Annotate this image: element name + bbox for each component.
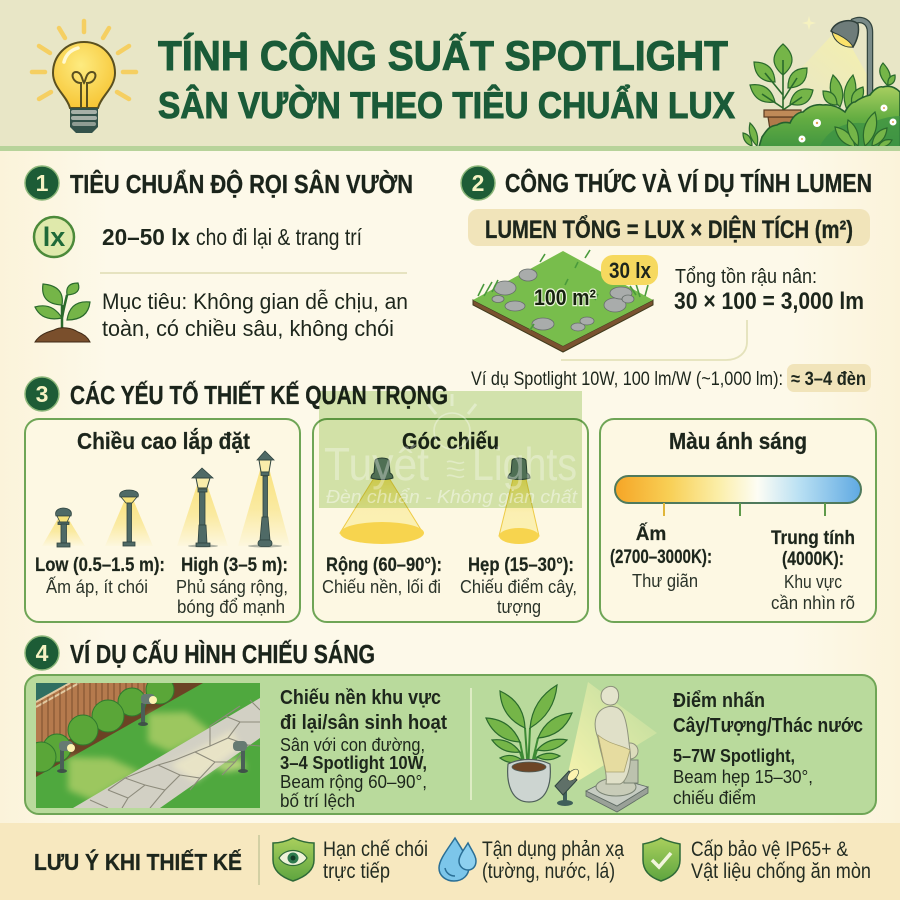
ambient lighting text: 3–4 Spotlight 10W, [280, 753, 427, 773]
heading 3 [25, 377, 448, 411]
icon: low bollard lamp [42, 508, 85, 547]
heading 4: 4 [36, 640, 49, 666]
title: TÍNH CÔNG SUẤT SPOTLIGHT [158, 31, 728, 79]
lux range text [102, 224, 363, 250]
illustration: garden lamp, potted plant and bushes [743, 16, 900, 150]
lux range text: 20–50 lx [102, 224, 190, 250]
back leaves [830, 75, 843, 107]
watermark: Đèn chuẩn - Không gian chất [326, 487, 578, 507]
goal text: toàn, có chiều sâu, không chói [102, 316, 394, 341]
accent lighting text: Điểm nhấn [673, 690, 765, 712]
panel: mounting height [25, 419, 300, 622]
watermark: Lights [472, 438, 577, 490]
spotlights in scene [57, 694, 248, 773]
panel: beam angle [313, 419, 588, 622]
icon: lux badge [34, 217, 74, 257]
accent lighting text [673, 690, 863, 808]
high label: Phủ sáng rộng, [176, 576, 288, 597]
heading 4 [25, 636, 375, 670]
note: protection [691, 838, 871, 883]
narrow label: Chiếu điểm cây, [460, 576, 577, 597]
heading 1 [25, 166, 413, 200]
icon: shield with check [643, 838, 680, 881]
wide label: Rộng (60–90°): [326, 555, 442, 576]
accent lighting text: Beam hẹp 15–30°, [673, 767, 813, 787]
accent lighting text: chiếu điểm [673, 788, 756, 808]
narrow label: tượng [497, 596, 541, 617]
badge: 30 lx: 30 lx [609, 258, 652, 283]
ambient lighting text: Chiếu nền khu vực [280, 687, 441, 709]
heading 3: 3 [36, 381, 48, 407]
neutral label [771, 528, 855, 613]
warm label: Ấm [636, 523, 666, 545]
icon: seedling [35, 283, 90, 342]
narrow label [460, 555, 577, 617]
icon: lux badge: lx [43, 222, 65, 252]
icon: tall lantern lamp [238, 451, 290, 548]
accent lighting text: 5–7W Spotlight, [673, 746, 795, 766]
total lumen text [674, 266, 864, 315]
illustration: garden path scene [26, 676, 260, 808]
accent lighting text: Cây/Tượng/Thác nước [673, 715, 863, 737]
section 1: lighting standard [25, 166, 413, 342]
footer heading: LƯU Ý KHI THIẾT KẾ [34, 848, 242, 875]
illustration: potted plant [486, 685, 572, 802]
warm label: (2700–3000K): [610, 547, 712, 568]
header banner [0, 0, 900, 151]
colour temperature bar [615, 476, 861, 516]
low label: Ấm áp, ít chói [46, 576, 148, 597]
illustration: 100 m2 lawn [473, 250, 653, 352]
section 2: formula and example [461, 166, 872, 392]
title [158, 31, 735, 126]
high label [176, 555, 288, 617]
arrow connector [561, 320, 747, 360]
total lumen text: Tổng tồn rậu nân: [675, 266, 817, 288]
note: glare [323, 838, 428, 883]
watermark [319, 391, 582, 508]
stone path [73, 698, 260, 808]
low label [35, 555, 165, 597]
neutral label: cần nhìn rõ [771, 592, 855, 613]
example note [471, 364, 871, 392]
narrow label: Hẹp (15–30°): [468, 555, 574, 576]
wide label [322, 555, 442, 597]
heading 4: VÍ DỤ CẤU HÌNH CHIẾU SÁNG [70, 639, 375, 669]
panel: configuration examples [25, 675, 876, 814]
warm label [610, 523, 712, 591]
low label: Low (0.5–1.5 m): [35, 555, 165, 576]
lux range text: cho đi lại & trang trí [196, 224, 363, 250]
heading 1: TIÊU CHUẨN ĐỘ RỌI SÂN VƯỜN [70, 169, 413, 199]
icon: narrow beam cone [499, 458, 539, 544]
footer: design notes [0, 823, 900, 900]
note: protection: Cấp bảo vệ IP65+ & [691, 838, 848, 861]
goal text: Mục tiêu: Không gian dễ chịu, an [102, 289, 408, 314]
illustration: statue on plinth [586, 686, 648, 812]
light pools on grass [68, 712, 246, 800]
ambient lighting text: đi lại/sân sinh hoạt [280, 712, 447, 734]
total lumen text: 30 × 100 = 3,000 lm [674, 288, 864, 315]
icon: light bulb [32, 21, 136, 133]
high label: bóng đổ mạnh [177, 596, 285, 617]
neutral label: Khu vực [784, 571, 842, 592]
plant stems, leaves, pot [750, 44, 813, 105]
watermark: Tuyết [324, 438, 429, 490]
ambient lighting text: Sân với con đường, [280, 735, 425, 755]
panel: mounting height: Chiều cao lắp đặt [77, 427, 250, 454]
ambient lighting text [280, 687, 447, 811]
icon: shield with eye [273, 838, 314, 881]
wide label: Chiếu nền, lối đi [322, 576, 441, 597]
icon: medium lantern lamp [177, 468, 228, 548]
illustration: spotlight with beam [555, 682, 657, 806]
icon: water drops [439, 838, 476, 881]
example note: ≈ 3–4 đèn [791, 369, 866, 390]
front leaves [863, 112, 877, 146]
example note: Ví dụ Spotlight 10W, 100 lm/W (~1,000 lm): [471, 369, 783, 390]
heading 2: 2 [472, 170, 484, 196]
formula bar [468, 209, 870, 246]
heading 3: CÁC YẾU TỐ THIẾT KẾ QUAN TRỌNG [70, 380, 448, 410]
warm label: Thư giãn [632, 570, 698, 591]
note: reflection [482, 838, 624, 883]
panel: beam angle: Góc chiếu [402, 428, 499, 454]
ambient lighting text: bố trí lệch [280, 791, 355, 811]
note: reflection: (tường, nước, lá) [482, 860, 615, 883]
goal text [102, 289, 408, 341]
note: glare: Hạn chế chói [323, 838, 428, 861]
panel: light colour: Màu ánh sáng [669, 428, 807, 454]
high label: High (3–5 m): [181, 555, 288, 576]
note: glare: trực tiếp [323, 860, 390, 883]
neutral label: Trung tính [771, 528, 855, 549]
note: protection: Vật liệu chống ăn mòn [691, 860, 871, 883]
icon: wide beam cone [340, 458, 424, 544]
ambient lighting text: Beam rộng 60–90°, [280, 772, 427, 792]
flowers [798, 104, 896, 142]
panel: light colour [600, 419, 876, 622]
neutral label: (4000K): [782, 549, 844, 570]
illustration: 100 m2 lawn: 100 m² [534, 285, 596, 310]
bush [758, 86, 900, 150]
note: reflection: Tận dụng phản xạ [482, 838, 624, 861]
title: SÂN VƯỜN THEO TIÊU CHUẨN LUX [158, 84, 735, 126]
heading 1: 1 [36, 170, 49, 196]
icon: short post lamp [105, 490, 153, 546]
